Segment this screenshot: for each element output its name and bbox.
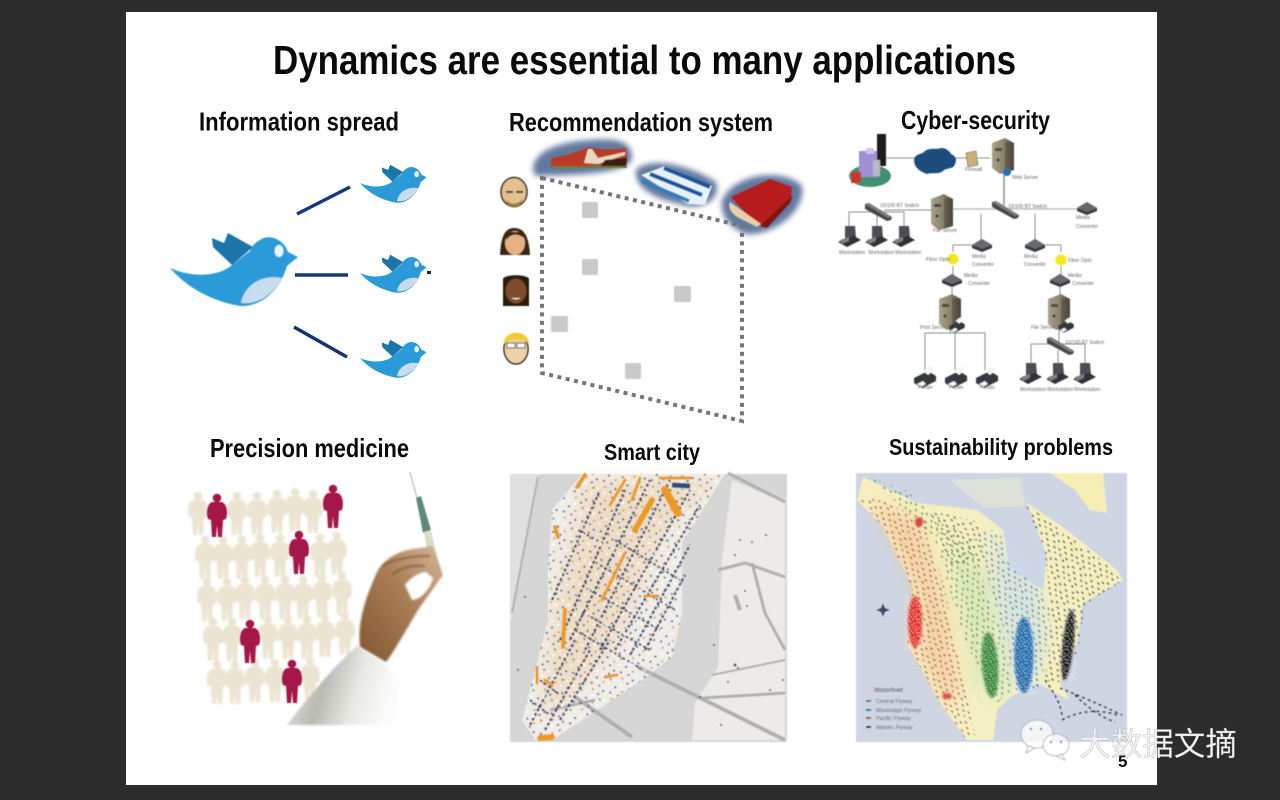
highlighted red patients (207, 485, 343, 703)
mississippi flyway (975, 530, 1050, 690)
small network labels: Converter (1072, 281, 1094, 287)
watermark text: 大数据文摘 (1079, 719, 1237, 765)
small network labels: Fiber Optic (926, 257, 951, 263)
scattered trip dots (517, 534, 784, 726)
small network labels: Workstation (1020, 387, 1047, 393)
icon: red shoe (551, 147, 627, 168)
icon: striped towel (641, 166, 712, 205)
icon: left server (931, 194, 953, 230)
east land (692, 480, 785, 740)
icon: red book (729, 179, 793, 228)
icon: right lower switch (1047, 337, 1074, 355)
watermark: WeChat icon (1021, 720, 1069, 760)
small network labels: 10/100 BT Switch (1065, 340, 1104, 346)
dense flyway clusters (905, 517, 1077, 700)
heading: recommendation system: Recommendation system (509, 107, 773, 137)
small network labels: 10/100 BT Switch (880, 203, 919, 209)
small network labels: Media (1024, 254, 1038, 260)
small network labels: Print Server (920, 325, 947, 331)
panel: sustainability problems (856, 434, 1127, 742)
map legend: Pacific Flyway (876, 716, 911, 722)
icon: central switch (992, 201, 1019, 219)
blue cluster (1014, 617, 1034, 693)
avenue trips (530, 480, 700, 730)
small network labels: Printer (918, 385, 933, 391)
title: Dynamics are essential to many applications (273, 37, 1016, 83)
icon: left switch (865, 203, 892, 221)
small network labels: Workstation (839, 250, 866, 256)
small network labels: Converter (968, 281, 990, 287)
west land (510, 474, 540, 620)
heading: precision medicine: Precision medicine (210, 433, 409, 463)
icon: firewall (966, 151, 978, 167)
caribbean routes (1045, 680, 1122, 722)
highway roads (512, 473, 785, 740)
small network labels (839, 167, 1104, 393)
small network labels: Workstation (1047, 387, 1074, 393)
map legend: Mississippi Flyway (876, 708, 921, 714)
icons: lower servers (939, 294, 961, 330)
icons: media converter hubs (1077, 202, 1097, 215)
Greenland (1050, 473, 1107, 513)
orange taxi hotspots (537, 475, 690, 738)
panel: cyber-security (838, 105, 1104, 393)
slide number: 5 (1118, 752, 1127, 771)
small network labels: Web Server (1012, 175, 1039, 181)
map legend: Atlantic Flyway (876, 725, 913, 731)
small network labels: Media (1068, 273, 1082, 279)
population of beige figures (188, 488, 355, 704)
small network labels: Firewall (965, 167, 982, 173)
green cluster (980, 632, 1000, 698)
scattered pickups on the island (522, 474, 725, 740)
finger shading (382, 556, 430, 575)
icon: top retweet bird (360, 165, 427, 203)
icons: workstations left (838, 226, 861, 247)
small network labels: Printer (980, 385, 995, 391)
panel: smart city (510, 439, 787, 742)
icon: user faces (500, 178, 530, 364)
small network labels: Media (972, 254, 986, 260)
icon: headquarters building (849, 134, 891, 187)
small network labels: Fiber Optic (1068, 258, 1093, 264)
network links (849, 158, 1085, 370)
heading: information spread: Information spread (199, 106, 399, 136)
small network labels: Converter (1024, 262, 1046, 268)
North America land (857, 477, 1123, 740)
map legend: Waterfowl (874, 687, 903, 694)
icons: printers (914, 366, 936, 388)
small network labels: Media (1076, 215, 1090, 221)
waterfowl flyway map (856, 473, 1127, 742)
mark: small dash (427, 271, 431, 274)
small network labels: Workstation (1074, 387, 1101, 393)
icons: yellow fiber links (948, 254, 958, 264)
panel: precision medicine (188, 433, 443, 725)
heading: cyber-security: Cyber-security (901, 105, 1050, 135)
white cluster speckle (905, 595, 1076, 700)
ocean base (856, 473, 1127, 742)
icon: internet cloud (914, 148, 956, 174)
small network labels: File Server (933, 228, 958, 234)
icon: web server (992, 138, 1014, 174)
icon: large source bird (170, 233, 298, 306)
small network labels: File Server (1031, 325, 1056, 331)
Pacific flyway (858, 497, 975, 738)
panel: information spread (170, 106, 431, 378)
rating markers (551, 202, 691, 379)
icon: middle retweet bird (360, 255, 427, 293)
small network labels: 10/100 BT Switch (1008, 204, 1047, 210)
lab coat sleeve (287, 646, 400, 725)
map base (510, 474, 787, 742)
dark blue hotspot (672, 485, 690, 486)
map legend: Central Flyway (876, 699, 913, 705)
Arctic islands (950, 478, 1026, 508)
icon: bottom retweet bird (360, 340, 427, 378)
panel: recommendation system (500, 107, 802, 421)
arrow: top spread line (297, 187, 350, 214)
small network labels: Converter (1076, 224, 1098, 230)
hand (360, 546, 443, 662)
flyway colour bands (870, 500, 1045, 710)
icons: server printers (949, 317, 965, 333)
small network labels: Workstation (895, 250, 922, 256)
small network labels: Printer (949, 385, 964, 391)
black cluster (1059, 610, 1077, 680)
peach district blur (540, 480, 715, 720)
small network labels: Media (964, 273, 978, 279)
atlantic flyway (1025, 503, 1120, 685)
arrow: bottom spread line (294, 327, 347, 357)
heading: smart city: Smart city (604, 439, 700, 465)
icons: workstations right (1019, 363, 1042, 384)
network diagram (838, 134, 1104, 393)
small network labels: Converter (972, 262, 994, 268)
taxi map of Manhattan (510, 473, 787, 742)
island of Manhattan (522, 474, 725, 740)
arrow: middle spread line (295, 273, 348, 277)
syringe (410, 472, 440, 572)
small network labels: Workstation (868, 250, 895, 256)
icon: compass rose (876, 603, 890, 617)
map legend (866, 687, 921, 731)
cross-street trips (530, 530, 680, 715)
central flyway (870, 478, 1012, 705)
north brown flyway (930, 510, 985, 565)
user-item matrix outline (542, 178, 742, 421)
slide background (126, 12, 1157, 785)
red cluster (908, 596, 922, 648)
item halos (533, 139, 802, 234)
heading: sustainability problems: Sustainability problems (889, 434, 1113, 460)
